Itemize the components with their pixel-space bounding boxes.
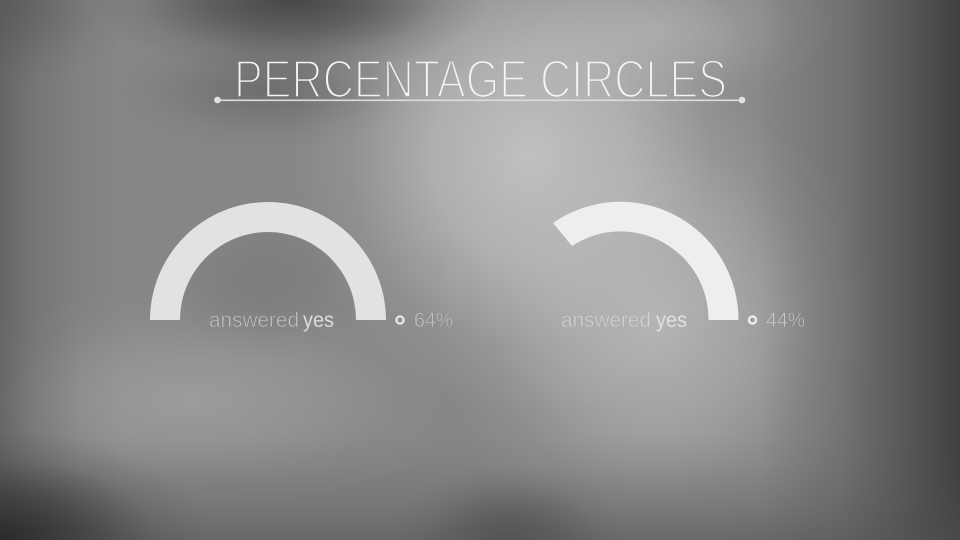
legend marker ring: [396, 316, 404, 324]
label: answered yes: answered: [561, 309, 651, 332]
panel: 64% gauge: [150, 202, 453, 332]
legend marker ring: [749, 316, 756, 324]
arc: 64 percent: [150, 202, 386, 320]
value: 44%: 44%: [766, 309, 805, 332]
label: answered yes: yes: [303, 309, 334, 332]
label: answered yes: [562, 312, 686, 332]
label: answered yes: answered: [209, 309, 299, 332]
label: answered yes: yes: [656, 309, 687, 332]
title: PERCENTAGE CIRCLES: [234, 50, 727, 110]
arc: 44 percent: [553, 202, 739, 320]
panel: 44% gauge: [553, 202, 805, 332]
label: answered yes: [210, 312, 334, 332]
title underline with end dots: [214, 97, 745, 103]
value: 64%: 64%: [414, 309, 453, 332]
